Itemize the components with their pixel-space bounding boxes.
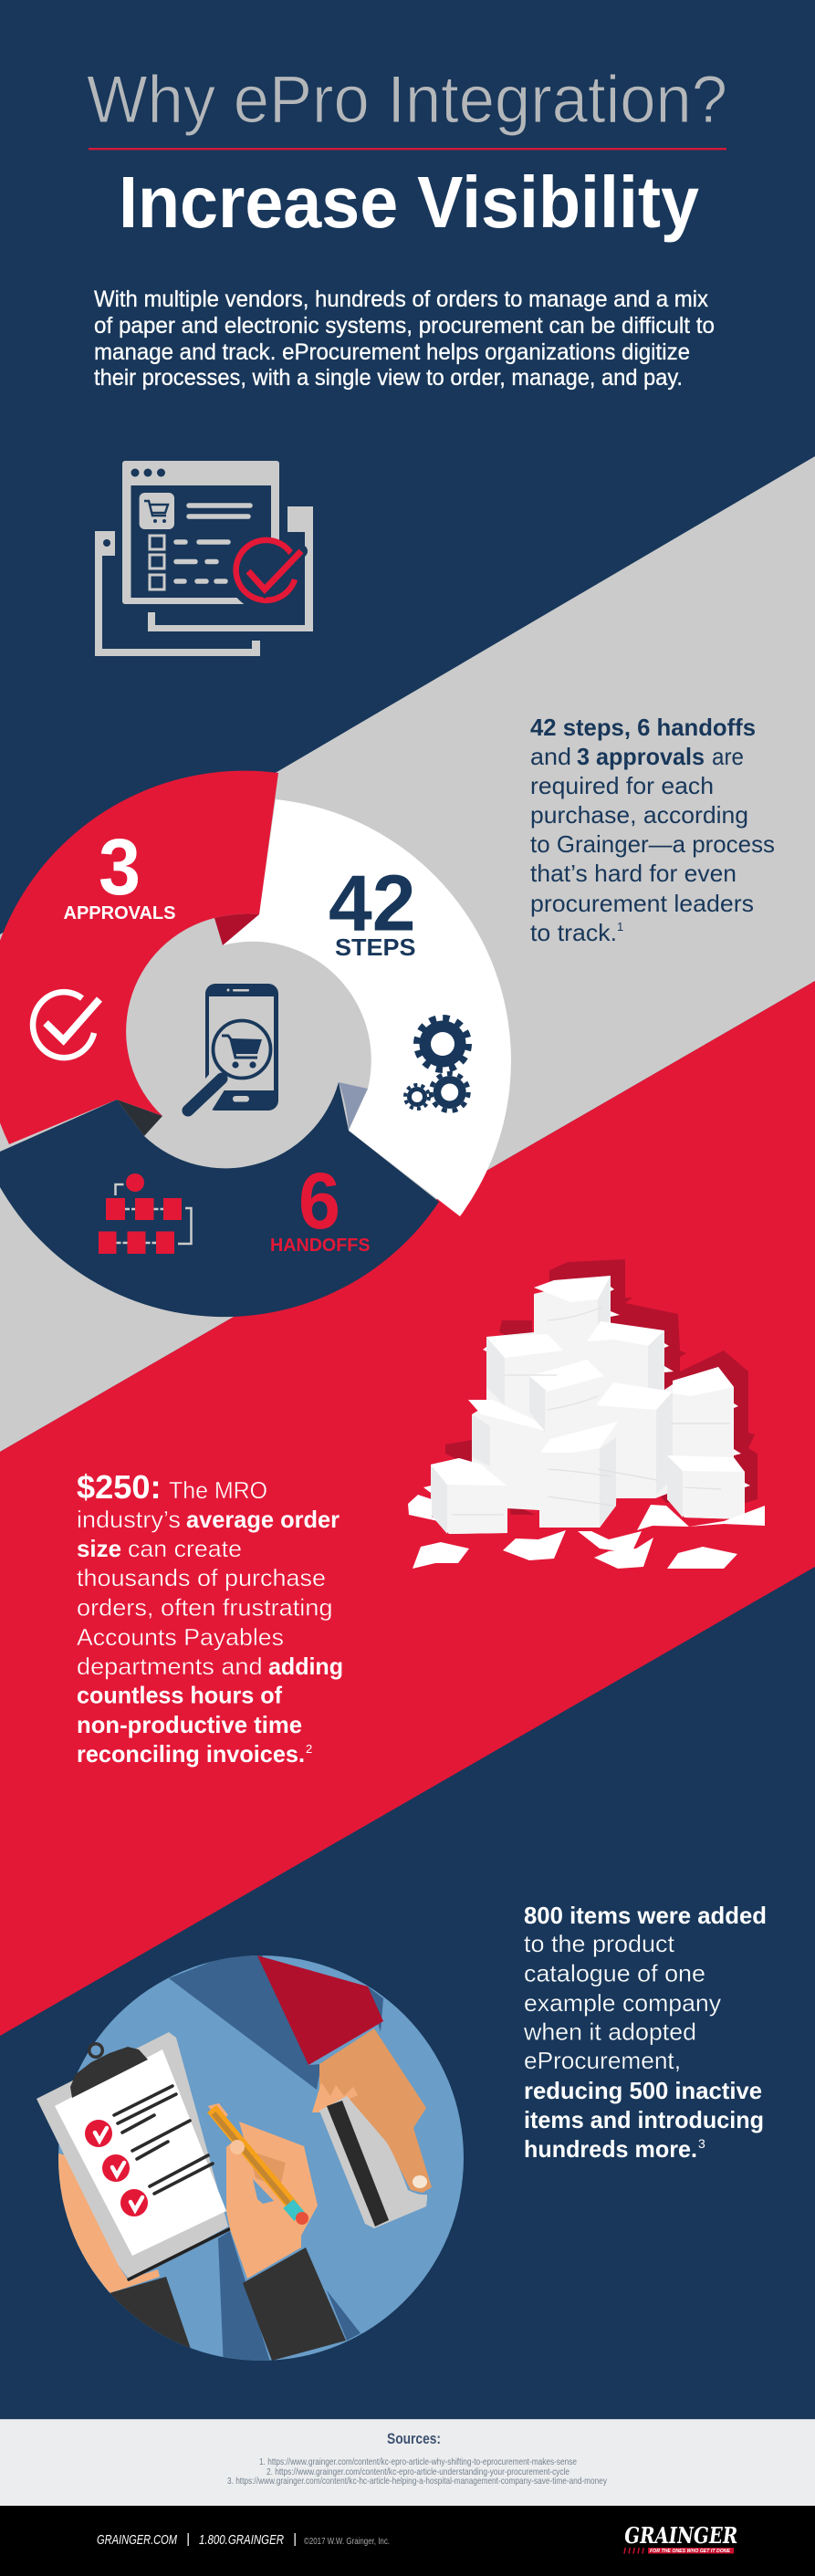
stat: 6 handoffs <box>270 1157 371 1256</box>
stat: 6 handoffs: 6 <box>298 1157 340 1246</box>
side text: 42 steps: and <box>530 743 571 770</box>
stat: 3 approvals: APPROVALS <box>64 903 175 923</box>
segment notch: charcoal fold <box>117 1100 162 1136</box>
text: 800 items: items and introducing <box>524 2106 764 2133</box>
text: $250 order size: departments and <box>77 1653 263 1680</box>
segment notch: blue-grey fold <box>339 1082 368 1130</box>
icon: gears <box>405 1018 469 1111</box>
text: 800 items: 3 <box>698 2136 705 2151</box>
side text: 42 steps: purchase, according <box>530 801 748 829</box>
text: $250 order size: size <box>77 1535 121 1562</box>
side text: 42 steps: 3 approvals <box>577 743 705 770</box>
red divider rule <box>89 148 726 150</box>
side text: 42 steps: procurement leaders <box>530 890 754 917</box>
heading: Increase Visibility: Increase Visibility <box>119 162 699 243</box>
text: $250 order size: $250: <box>77 1468 161 1506</box>
pile silhouette <box>431 1276 745 1534</box>
text: $250 order size: industry’s <box>77 1506 181 1533</box>
background: grey diagonal band <box>0 456 815 1452</box>
panel: sources <box>0 2419 815 2506</box>
clipboard <box>37 2032 229 2281</box>
intro paragraph: of paper and electronic systems, procurement can be difficult to <box>94 313 715 339</box>
text: $250 order size: reconciling invoices. <box>77 1740 305 1768</box>
paper stacks <box>423 1276 750 1534</box>
footer contact line: | <box>186 2531 190 2547</box>
illustration: paper pile <box>408 1259 765 1569</box>
text: $250 order size: can create <box>128 1535 242 1562</box>
stat: 6 handoffs: HANDOFFS <box>270 1235 371 1256</box>
intro paragraph <box>94 287 715 391</box>
text: 800 items: to the product <box>524 1930 675 1957</box>
source list <box>227 2456 608 2487</box>
text: 800 items: example company <box>524 1989 721 2017</box>
footer contact line <box>97 2531 297 2548</box>
text: $250 order size: thousands of purchase <box>77 1564 326 1591</box>
pile shadow <box>445 1259 758 1515</box>
Grainger logo <box>622 2522 740 2554</box>
blue circle with shaded panels <box>55 1944 465 2368</box>
title block <box>87 63 727 243</box>
side text: 42 steps: 1 <box>617 920 623 933</box>
stat: 3 approvals <box>64 823 175 923</box>
intro paragraph: their processes, with a single view to order, manage, and pay. <box>94 365 683 391</box>
text: $250 order size: non-productive time <box>77 1711 302 1738</box>
text: 800 items: reducing 500 inactive <box>524 2077 762 2104</box>
text: $250 order size: 2 <box>306 1742 312 1756</box>
stat: 42 steps: 42 <box>329 860 416 947</box>
sources heading: Sources: <box>387 2431 441 2447</box>
text: $250 order size: adding <box>268 1653 343 1680</box>
segment: 6 handoffs (navy) <box>0 1082 439 1317</box>
text: 800 items: 800 items were added <box>524 1902 767 1929</box>
credit card hand and red sleeve <box>257 1955 432 2228</box>
side text: 42 steps: to Grainger—a process <box>530 830 775 858</box>
text: 800 items <box>523 1902 767 2163</box>
stat: 42 steps: STEPS <box>335 933 416 961</box>
footer bar <box>0 2506 815 2576</box>
text: $250 order size: The MRO <box>169 1476 267 1504</box>
segment notch: dark red fold <box>214 914 259 945</box>
text: $250 order size: countless hours of <box>77 1681 282 1708</box>
side text: 42 steps <box>530 714 775 946</box>
side text: 42 steps: to track. <box>530 919 617 946</box>
icon: smartphone with magnifier and cart <box>181 984 278 1115</box>
text: $250 order size: Accounts Payables <box>77 1623 284 1651</box>
text: $250 order size: orders, often frustrating <box>77 1593 332 1621</box>
illustration: hands, clipboard and credit card <box>37 1944 465 2368</box>
footer contact line: | <box>293 2531 297 2547</box>
segment: 3 approvals (red) <box>0 771 278 1144</box>
right hand with pencil <box>208 2103 346 2361</box>
side text: 42 steps: are <box>712 743 744 770</box>
text: 800 items: hundreds more. <box>524 2135 697 2163</box>
source list: 3. https://www.grainger.com/content/kc-hc-article-helping-a-hospital-management-company-save-time-and-money <box>227 2476 608 2487</box>
segment: 42 steps (white) <box>223 799 511 1216</box>
icon: handoff flowchart <box>99 1173 192 1254</box>
text: $250 order size: average order <box>186 1506 340 1533</box>
text: 800 items: eProcurement, <box>524 2047 681 2074</box>
intro paragraph: manage and track. eProcurement helps organizations digitize <box>94 339 690 365</box>
icon: ordering window with red check <box>95 461 313 656</box>
footer contact line: GRAINGER.COM <box>97 2532 177 2548</box>
icon: white check <box>33 992 99 1058</box>
intro paragraph: With multiple vendors, hundreds of orders to manage and a mix <box>94 287 708 312</box>
donut diagram <box>0 771 511 1317</box>
side text: 42 steps: that’s hard for even <box>530 860 737 887</box>
Grainger logo: FOR THE ONES WHO GET IT DONE <box>650 2549 730 2554</box>
left hand and sleeve <box>55 2154 193 2354</box>
heading: Why ePro Integration?: Why ePro Integration? <box>87 63 727 137</box>
source list: 1. https://www.grainger.com/content/kc-epro-article-why-shifting-to-eprocurement-makes-sense <box>259 2456 577 2467</box>
copyright: ©2017 W.W. Grainger, Inc. <box>304 2536 390 2547</box>
Grainger logo: GRAINGER <box>622 2522 740 2549</box>
text: 800 items: catalogue of one <box>524 1960 705 1987</box>
text: 800 items: when it adopted <box>523 2018 696 2046</box>
loose sheets <box>408 1495 765 1569</box>
background: red diagonal band <box>0 981 815 2036</box>
text: $250 order size <box>77 1468 343 1768</box>
side text: 42 steps: 42 steps, 6 handoffs <box>530 714 756 741</box>
footer contact line: 1.800.GRAINGER <box>199 2532 284 2548</box>
side text: 42 steps: required for each <box>530 772 714 799</box>
source list: 2. https://www.grainger.com/content/kc-epro-article-understanding-your-procurement-cycle <box>266 2466 569 2477</box>
stat: 3 approvals: 3 <box>99 823 141 912</box>
